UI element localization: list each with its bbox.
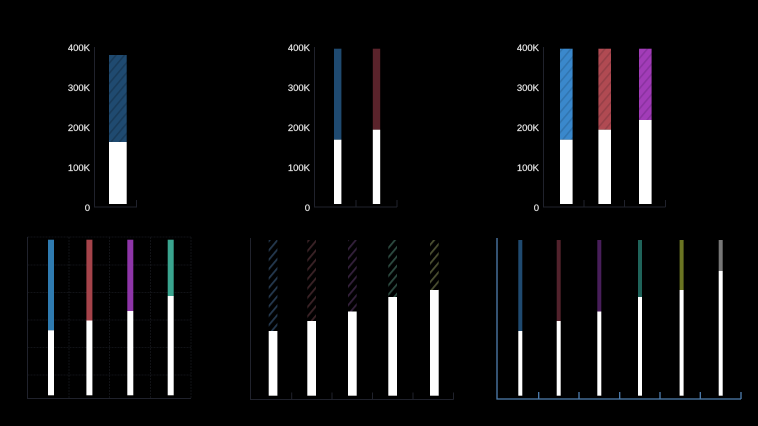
bar 1 (560, 49, 573, 204)
bar 5 (680, 240, 684, 396)
axes (314, 47, 397, 207)
bar 2 (373, 49, 380, 204)
y axis labels (517, 43, 540, 214)
bar 1 (269, 240, 277, 396)
chart: bottom-right six thin bars with blue axes (497, 238, 741, 399)
bar 4 (638, 240, 642, 396)
bar 4 (168, 240, 174, 395)
y axis labels: 200K (517, 123, 540, 134)
y axis labels: 100K (288, 163, 311, 174)
bar 1 (334, 49, 341, 204)
y axis labels: 300K (288, 83, 311, 94)
y axis labels: 200K (68, 123, 91, 134)
y axis labels (68, 43, 91, 214)
chart: bottom-middle five bars with faint hatch (250, 238, 454, 400)
bar 3 (597, 240, 601, 396)
bar 1 (48, 240, 54, 395)
y axis labels: 0 (305, 203, 310, 214)
y axis labels: 0 (85, 203, 90, 214)
grid (28, 237, 191, 399)
bar (109, 55, 127, 204)
axes (497, 238, 741, 399)
bar 5 (430, 240, 439, 396)
bar 1 (518, 240, 522, 396)
y axis labels: 0 (534, 203, 539, 214)
bar 2 (598, 49, 611, 204)
y axis labels: 100K (517, 163, 540, 174)
y axis labels: 400K (68, 43, 91, 54)
y axis labels: 300K (517, 83, 540, 94)
bar 2 (86, 240, 92, 395)
bar 3 (127, 240, 133, 395)
bar 2 (557, 240, 561, 396)
axes (94, 47, 136, 207)
bar 3 (639, 49, 652, 204)
y axis labels: 400K (288, 43, 311, 54)
bar 6 (719, 240, 723, 396)
y axis labels: 100K (68, 163, 91, 174)
chart: top-middle two stacked bars (288, 43, 397, 214)
y axis labels (288, 43, 311, 214)
y axis labels: 200K (288, 123, 311, 134)
axes (28, 237, 191, 398)
bar 3 (348, 240, 357, 396)
axes (544, 47, 666, 207)
chart: top-right three stacked bars (517, 43, 666, 214)
y axis labels: 400K (517, 43, 540, 54)
chart: bottom-left four bars with grid (28, 237, 191, 399)
axes (250, 238, 454, 400)
chart: top-left single stacked bar (68, 43, 136, 214)
bar 2 (307, 240, 316, 396)
y axis labels: 300K (68, 83, 91, 94)
bar 4 (388, 240, 397, 396)
